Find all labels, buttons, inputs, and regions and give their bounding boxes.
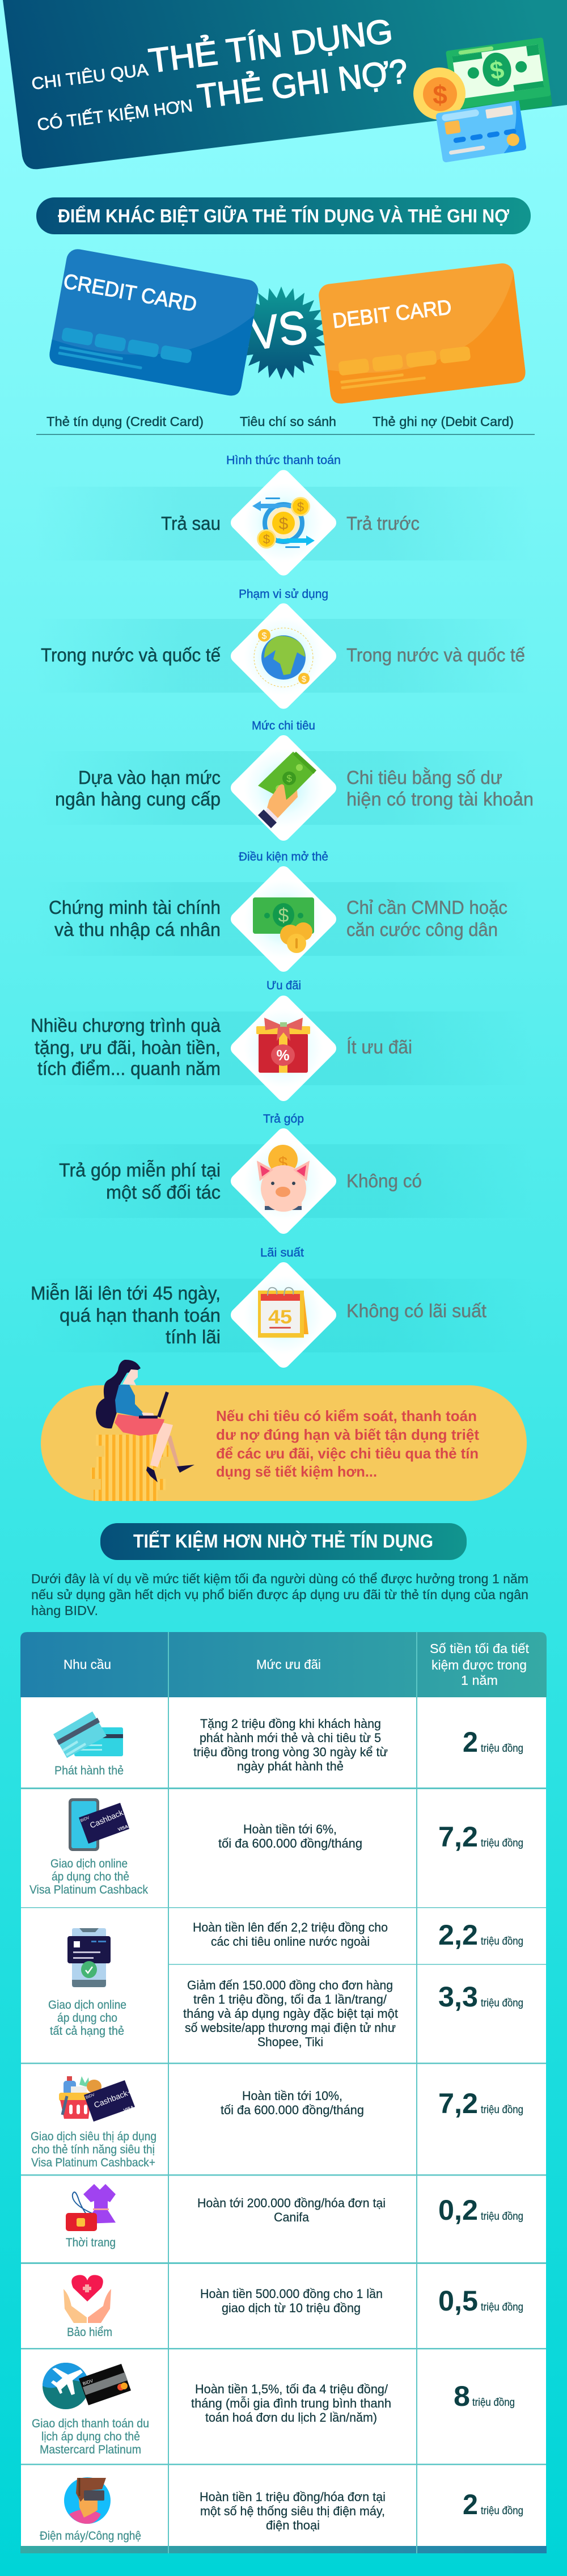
row: spending limit: Chi tiêu bằng số dư bbox=[346, 767, 502, 788]
row: opening conditions: Chứng minh tài chính bbox=[49, 897, 221, 918]
table header: kiệm được trong bbox=[431, 1658, 527, 1672]
row: travel Mastercard Platinum bbox=[32, 2363, 515, 2456]
row: supermarket: tối đa 600.000 đồng/tháng bbox=[221, 2103, 364, 2117]
icon: cash and coins: $ bbox=[278, 905, 289, 926]
row: insurance: 0,5 bbox=[438, 2285, 478, 2317]
row: travel Mastercard Platinum: Mastercard Platinum bbox=[40, 2443, 141, 2456]
icon: coins and arrows: $ bbox=[263, 532, 270, 546]
icon: calendar: 45 bbox=[268, 1306, 292, 1328]
row: supermarket bbox=[31, 2076, 523, 2169]
row: all card tiers online bbox=[48, 1919, 523, 2049]
icon: two cards bbox=[53, 1711, 123, 1758]
row: travel Mastercard Platinum: tháng (mỗi gia đình trung bình thanh bbox=[191, 2396, 391, 2410]
row: travel Mastercard Platinum: triệu đồng bbox=[472, 2397, 515, 2409]
table header: Số tiền tối đa tiết bbox=[430, 1641, 530, 1656]
section heading: savings: TIẾT KIỆM HƠN NHỜ THẺ TÍN DỤNG bbox=[133, 1531, 433, 1551]
row: insurance: Hoàn tiền 500.000 đồng cho 1 lần bbox=[200, 2287, 383, 2301]
row: travel Mastercard Platinum: toán hoá đơn du lịch 2 lần/năm) bbox=[205, 2410, 377, 2425]
row: promotions: tặng, ưu đãi, hoàn tiền, bbox=[35, 1037, 221, 1058]
icon: piggy bank bbox=[257, 1145, 310, 1212]
row: scope of use: Phạm vi sử dụng bbox=[239, 588, 328, 601]
debit card bbox=[318, 262, 527, 405]
icon: coins and arrows: $ bbox=[279, 515, 289, 533]
row: promotions: Nhiều chương trình quà bbox=[31, 1015, 221, 1036]
row: installments: Trả góp bbox=[263, 1112, 304, 1125]
row: payment form: Trả trước bbox=[346, 513, 420, 534]
icon: coins and arrows bbox=[252, 497, 315, 549]
row: installments: Không có bbox=[346, 1170, 422, 1191]
row: insurance: giao dịch từ 10 triệu đồng bbox=[222, 2301, 361, 2315]
row: scope of use: Trong nước và quốc tế bbox=[346, 644, 525, 665]
row: spending limit: hiện có trong tài khoản bbox=[346, 789, 534, 810]
row: all card tiers online: tất cả hạng thẻ bbox=[50, 2025, 124, 2038]
row: Visa Platinum Cashback: Hoàn tiền tới 6%, bbox=[243, 1822, 337, 1836]
credit card: CREDIT CARD bbox=[62, 269, 198, 316]
row: all card tiers online: triệu đồng bbox=[481, 1997, 523, 2009]
row: Visa Platinum Cashback: triệu đồng bbox=[481, 1837, 523, 1849]
row: installments: một số đối tác bbox=[106, 1182, 221, 1203]
table header: Nhu cầu bbox=[64, 1657, 111, 1672]
intro paragraph bbox=[31, 1571, 528, 1618]
row: Visa Platinum Cashback: Giao dịch online bbox=[50, 1857, 128, 1870]
icon: basket and cashback+ card: Cashback+ bbox=[92, 2087, 133, 2110]
icon: bank card bbox=[435, 100, 527, 163]
row: supermarket: Giao dịch siêu thị áp dụng bbox=[31, 2130, 156, 2143]
row: opening conditions: Điều kiện mở thẻ bbox=[239, 850, 328, 863]
icon: basket and cashback+ card bbox=[59, 2076, 135, 2122]
row: promotions: Ưu đãi bbox=[266, 979, 301, 992]
callout text: dư nợ đúng hạn và biết tận dụng triệt bbox=[216, 1426, 479, 1443]
title: THẺ GHI NỢ? bbox=[195, 52, 410, 116]
row: all card tiers online: 3,3 bbox=[438, 1981, 478, 2013]
title: CÓ TIẾT KIỆM HƠN bbox=[36, 96, 194, 134]
row: spending limit: Mức chi tiêu bbox=[252, 719, 315, 732]
row: supermarket: cho thẻ tính năng siêu thị bbox=[32, 2143, 155, 2156]
row: electronics bbox=[40, 2477, 523, 2543]
row: scope of use: Trong nước và quốc tế bbox=[41, 644, 221, 665]
intro paragraph: nếu sử dụng gần hết dịch vụ phổ biến được áp dụng ưu đãi từ thẻ tín dụng của ngân bbox=[31, 1587, 528, 1602]
icon: coin bbox=[413, 68, 466, 120]
intro paragraph: Dưới đây là ví dụ về mức tiết kiệm tối đa người dùng có thể được hưởng trong 1 năm bbox=[31, 1571, 528, 1586]
icon: gift box bbox=[256, 1018, 310, 1073]
row: supermarket: Visa Platinum Cashback+ bbox=[31, 2156, 155, 2169]
debit card: DEBIT CARD bbox=[331, 295, 453, 332]
row: all card tiers online: trên 1 triệu đồng, tối đa 1 lần/trang/ bbox=[193, 1992, 387, 2006]
section heading: differences bbox=[36, 197, 531, 234]
icon: globe bbox=[254, 628, 313, 687]
row: electronics: một số hệ thống siêu thị điện máy, bbox=[200, 2504, 385, 2518]
icon: phone and cashback card bbox=[69, 1798, 129, 1851]
section heading: savings bbox=[100, 1523, 467, 1560]
row: all card tiers online: 2,2 bbox=[438, 1919, 478, 1951]
icon: globe, plane and black card: BIDV bbox=[82, 2378, 94, 2387]
row: electronics: triệu đồng bbox=[481, 2505, 523, 2517]
icon: cash and coins bbox=[253, 897, 314, 953]
illustration: woman on coins bbox=[91, 1360, 194, 1501]
row: interest rate: tính lãi bbox=[166, 1326, 221, 1347]
icon: phone and cashback card: Cashback bbox=[88, 1807, 125, 1830]
row: fashion: Hoàn tới 200.000 đồng/hóa đơn tại bbox=[197, 2196, 386, 2210]
icon: basket and cashback+ card: VISA bbox=[123, 2105, 134, 2113]
title bbox=[31, 12, 410, 134]
row: Visa Platinum Cashback bbox=[29, 1798, 523, 1896]
row: opening conditions: căn cước công dân bbox=[346, 919, 498, 940]
row: card issuance: triệu đồng trong vòng 30 ngày kể từ bbox=[193, 1745, 388, 1759]
row: fashion: Thời trang bbox=[66, 2236, 116, 2249]
row: all card tiers online: Giảm đến 150.000 đồng cho đơn hàng bbox=[187, 1978, 393, 1992]
row: travel Mastercard Platinum: Giao dịch thanh toán du bbox=[32, 2417, 149, 2430]
table header: Mức ưu đãi bbox=[256, 1657, 321, 1672]
icon: globe, plane and black card bbox=[43, 2363, 131, 2409]
row: card issuance: 2 bbox=[463, 1726, 478, 1758]
icon: banknote bbox=[446, 37, 552, 120]
icon: dress and handbag bbox=[66, 2184, 116, 2231]
row: electronics: điện thoại bbox=[266, 2518, 320, 2532]
row: fashion: triệu đồng bbox=[481, 2211, 523, 2223]
row: Visa Platinum Cashback: áp dụng cho thẻ bbox=[52, 1870, 129, 1883]
icon: calendar bbox=[258, 1288, 308, 1338]
icon: phone and cashback card: VISA bbox=[117, 1824, 129, 1832]
savings table bbox=[20, 1632, 547, 2553]
row: all card tiers online: triệu đồng bbox=[481, 1936, 523, 1947]
row: all card tiers online: áp dụng cho bbox=[57, 2012, 117, 2025]
row: insurance: Bảo hiểm bbox=[67, 2326, 112, 2339]
row: promotions: Ít ưu đãi bbox=[346, 1036, 412, 1057]
icon: coin: $ bbox=[433, 80, 447, 109]
row: insurance: triệu đồng bbox=[481, 2301, 523, 2313]
row: supermarket: triệu đồng bbox=[481, 2104, 523, 2116]
column labels: Thẻ ghi nợ (Debit Card) bbox=[373, 414, 514, 429]
coin stacks bbox=[91, 1435, 168, 1501]
table header bbox=[20, 1632, 547, 1697]
row: spending limit: ngân hàng cung cấp bbox=[55, 789, 221, 810]
icon: person with VR headset bbox=[64, 2477, 111, 2524]
row: all card tiers online: tháng và áp dụng ngày đặc biệt tại một bbox=[183, 2006, 398, 2021]
row: supermarket: Hoàn tiền tới 10%, bbox=[242, 2089, 342, 2103]
callout text: để các ưu đãi, việc chi tiêu qua thẻ tín bbox=[216, 1445, 479, 1462]
row: insurance bbox=[64, 2275, 523, 2339]
row: fashion bbox=[66, 2184, 523, 2249]
icon: gift box: % bbox=[276, 1047, 290, 1064]
callout bbox=[41, 1360, 527, 1501]
row: opening conditions: Chỉ cần CMND hoặc bbox=[346, 897, 507, 918]
intro paragraph: hàng BIDV. bbox=[31, 1603, 98, 1618]
icon: basket and cashback+ card: BIDV bbox=[85, 2093, 95, 2100]
row: all card tiers online: các chi tiêu online nước ngoài bbox=[211, 1934, 370, 1949]
row: spending limit bbox=[34, 719, 534, 844]
icon: hand holding money bbox=[258, 752, 316, 828]
row: payment form: Trả sau bbox=[161, 513, 221, 534]
row: spending limit: Dựa vào hạn mức bbox=[78, 767, 221, 788]
icon: payment terminal bbox=[67, 1928, 111, 1987]
column labels: Thẻ tín dụng (Credit Card) bbox=[46, 414, 204, 429]
callout text: Nếu chi tiêu có kiểm soát, thanh toán bbox=[216, 1407, 477, 1424]
row: travel Mastercard Platinum: lịch áp dụng cho thẻ bbox=[41, 2430, 140, 2443]
row: fashion: 0,2 bbox=[438, 2194, 478, 2226]
row: travel Mastercard Platinum: 8 bbox=[454, 2380, 470, 2412]
table footer strip bbox=[20, 2546, 547, 2553]
callout text bbox=[216, 1407, 479, 1480]
icon: globe: $ bbox=[302, 674, 307, 684]
title: CHI TIÊU QUA bbox=[31, 61, 149, 94]
column labels: Tiêu chí so sánh bbox=[240, 414, 336, 429]
row: opening conditions: và thu nhập cá nhân bbox=[54, 919, 221, 940]
row: card issuance: ngày phát hành thẻ bbox=[237, 1759, 344, 1773]
row: fashion: Canifa bbox=[274, 2210, 310, 2224]
callout text: dụng sẽ tiết kiệm hơn... bbox=[216, 1463, 377, 1480]
row: interest rate bbox=[31, 1246, 533, 1371]
section heading: differences: ĐIỂM KHÁC BIỆT GIỮA THẺ TÍN DỤNG VÀ THẺ GHI NỢ bbox=[58, 205, 510, 226]
row: all card tiers online: Hoàn tiền lên đến 2,2 triệu đồng cho bbox=[193, 1920, 388, 1934]
row: all card tiers online: Giao dịch online bbox=[48, 1999, 126, 2012]
icon: money, coin and bank card bbox=[413, 37, 552, 163]
row: supermarket: 7,2 bbox=[438, 2088, 478, 2119]
row: interest rate: Lãi suất bbox=[260, 1246, 304, 1259]
row: electronics: 2 bbox=[463, 2489, 478, 2520]
row: opening conditions bbox=[34, 850, 533, 975]
row: promotions bbox=[31, 979, 533, 1104]
row: interest rate: Không có lãi suất bbox=[346, 1300, 486, 1321]
title: THẺ TÍN DỤNG bbox=[146, 12, 395, 80]
row: card issuance: triệu đồng bbox=[481, 1743, 523, 1755]
row: Visa Platinum Cashback: Visa Platinum Cashback bbox=[29, 1883, 148, 1896]
credit card bbox=[48, 247, 260, 397]
table header: 1 năm bbox=[461, 1673, 498, 1688]
icon: coins and arrows: $ bbox=[297, 500, 304, 514]
column labels bbox=[36, 414, 535, 435]
row: payment form bbox=[34, 454, 533, 579]
row: installments: Trả góp miễn phí tại bbox=[59, 1160, 221, 1181]
row: electronics: Điện máy/Công nghệ bbox=[40, 2529, 141, 2543]
row: electronics: Hoàn tiền 1 triệu đồng/hóa đơn tại bbox=[200, 2490, 386, 2504]
icon: heart and hands bbox=[64, 2275, 111, 2323]
icon: hand holding money: $ bbox=[286, 773, 292, 784]
row: payment form: Hình thức thanh toán bbox=[226, 454, 341, 467]
row: travel Mastercard Platinum: Hoàn tiền 1,5%, tối đa 4 triệu đồng/ bbox=[195, 2382, 388, 2396]
header banner bbox=[3, 0, 567, 169]
row: installments bbox=[34, 1112, 533, 1237]
row: card issuance: Phát hành thẻ bbox=[54, 1764, 124, 1777]
row: interest rate: quá hạn thanh toán bbox=[60, 1305, 221, 1326]
row: card issuance: phát hành mới thẻ và chi tiêu từ 5 bbox=[200, 1731, 381, 1745]
table body bbox=[21, 1696, 546, 2547]
row: scope of use bbox=[34, 588, 533, 712]
row: card issuance bbox=[53, 1711, 523, 1777]
row: card issuance: Tặng 2 triệu đồng khi khách hàng bbox=[200, 1717, 381, 1731]
VS badge: VS bbox=[247, 301, 311, 360]
icon: piggy bank: $ bbox=[278, 1154, 288, 1173]
row: all card tiers online: Shopee, Tiki bbox=[257, 2035, 323, 2049]
row: Visa Platinum Cashback: 7,2 bbox=[438, 1821, 478, 1853]
icon: globe: $ bbox=[262, 631, 267, 641]
row: interest rate: Miễn lãi lên tới 45 ngày, bbox=[31, 1283, 221, 1304]
VS badge bbox=[235, 286, 328, 380]
row: Visa Platinum Cashback: tối đa 600.000 đồng/tháng bbox=[218, 1836, 362, 1850]
icon: phone and cashback card: BIDV bbox=[80, 1816, 90, 1823]
row: promotions: tích điểm... quanh năm bbox=[37, 1058, 221, 1079]
icon: banknote: $ bbox=[488, 56, 506, 85]
row: all card tiers online: số website/app thương mại điện tử như bbox=[185, 2021, 396, 2035]
